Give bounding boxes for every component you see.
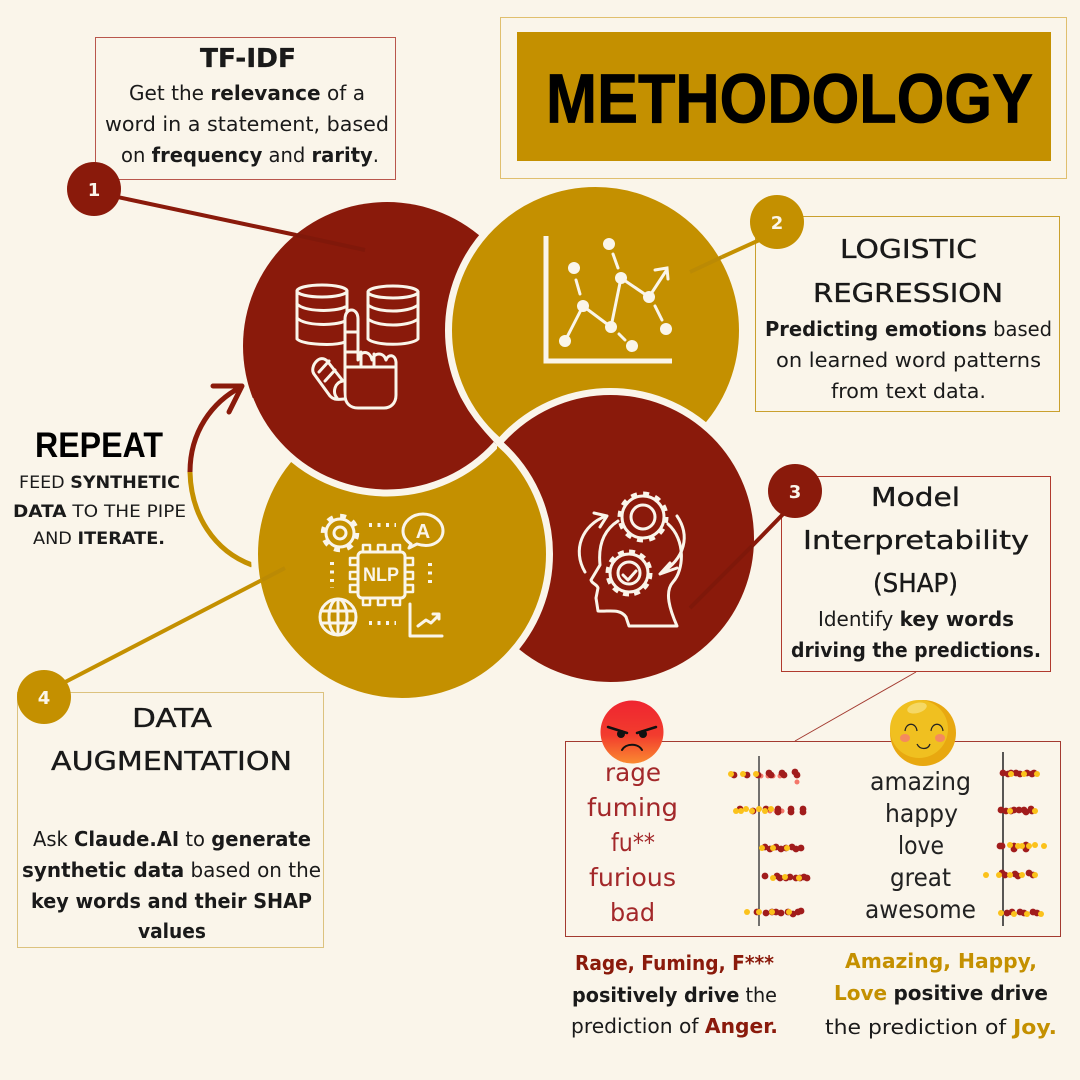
heading: logistic regression: LOGISTIC: [840, 235, 977, 265]
text: logistic description: on learned word patterns: [776, 348, 1041, 372]
list: anger words: fu**: [611, 828, 655, 857]
list: joy words: happy: [885, 799, 958, 828]
text: joy caption: [825, 949, 1057, 1039]
heading: data augmentation: DATA: [132, 704, 212, 734]
text: TF-IDF description: [105, 81, 389, 167]
icon: NLP chip: [320, 514, 443, 636]
circle: interpretability: [464, 392, 758, 686]
icon: angry emoji: [600, 700, 664, 764]
panel: logistic regression: [756, 216, 1060, 412]
line: connector 1: [94, 192, 296, 235]
icon: NLP chip: NLP: [363, 565, 399, 586]
badge: 3: [768, 464, 822, 518]
panel: SHAP beeswarm: [566, 742, 1060, 936]
text: SHAP description: Identify key words: [818, 607, 1014, 631]
text: repeat: [13, 426, 186, 549]
line: connector 4 inner: [262, 568, 285, 580]
text: anger caption: [571, 951, 778, 1038]
text: joy caption: Love positive drive: [834, 981, 1048, 1005]
heading: model interpretability: [803, 483, 1029, 599]
list: anger words: bad: [610, 898, 655, 927]
panel: title: [500, 18, 1066, 178]
list: joy words: amazing: [870, 767, 971, 796]
heading: TF-IDF: TF-IDF: [200, 44, 296, 74]
icon: happy emoji: [890, 700, 956, 766]
line: connector 1 inner: [296, 235, 365, 250]
panel: TF-IDF: [96, 38, 396, 180]
chart: joy SHAP dots: [983, 752, 1047, 926]
text: anger caption: Rage, Fuming, F***: [575, 951, 775, 975]
line: connector 2: [722, 233, 775, 257]
text: SHAP description: driving the predictions.: [791, 638, 1041, 662]
circle: TF-IDF overlap: [252, 398, 497, 496]
heading: model interpretability: Model: [871, 483, 960, 513]
text: anger caption: prediction of Anger.: [571, 1014, 778, 1038]
text: logistic description: Predicting emotions based: [765, 317, 1052, 341]
badge: 1: 1: [88, 180, 100, 201]
icon: databases and hand: [297, 285, 418, 408]
heading: logistic regression: [813, 235, 1003, 309]
text: augmentation description: key words and their SHAP: [31, 889, 312, 913]
heading: model interpretability: (SHAP): [873, 569, 958, 599]
line: connector 3: [752, 507, 790, 546]
text: augmentation description: [22, 827, 321, 943]
list: anger words: furious: [589, 863, 676, 892]
text: SHAP description: [791, 607, 1041, 662]
badge: 4: [17, 670, 71, 724]
heading: data augmentation: AUGMENTATION: [51, 747, 292, 777]
icon: head with gears: [579, 494, 684, 626]
arrow: repeat loop: [190, 386, 252, 565]
heading: logistic regression: REGRESSION: [813, 279, 1003, 309]
text: logistic description: from text data.: [831, 379, 986, 403]
circle: data augmentation: [254, 406, 550, 702]
list: anger words: rage: [605, 758, 661, 787]
badge: 2: 2: [771, 213, 783, 234]
badge: 4: 4: [38, 688, 50, 709]
badge: 1: [67, 162, 121, 216]
text: TF-IDF description: word in a statement, based: [105, 112, 389, 136]
line: connector 3 inner: [690, 546, 752, 608]
text: repeat: AND ITERATE.: [33, 529, 165, 549]
chart: anger SHAP dots: [728, 756, 810, 926]
heading: data augmentation: [51, 704, 292, 777]
text: anger caption: positively drive the: [572, 983, 777, 1007]
badge: 2: [750, 195, 804, 249]
list: joy words: great: [890, 863, 951, 892]
text: repeat: FEED SYNTHETIC: [19, 473, 180, 493]
text: joy caption: the prediction of Joy.: [825, 1015, 1057, 1039]
text: augmentation description: values: [138, 919, 206, 943]
list: anger words: fuming: [587, 793, 678, 822]
badge: 3: 3: [789, 482, 801, 503]
icon: NLP chip: A: [416, 521, 430, 543]
list: joy words: love: [898, 831, 944, 860]
text: repeat: DATA TO THE PIPE: [13, 502, 186, 522]
panel: model interpretability: [782, 476, 1050, 672]
panel: data augmentation: [18, 692, 324, 948]
text: logistic description: [765, 317, 1052, 403]
text: augmentation description: synthetic data based on the: [22, 858, 321, 882]
line: connector 4: [44, 580, 262, 693]
list: joy words: [865, 767, 976, 924]
line: connector 2 inner: [690, 257, 722, 272]
text: TF-IDF description: Get the relevance of a: [129, 81, 365, 105]
text: augmentation description: Ask Claude.AI to generate: [33, 827, 311, 851]
list: joy words: awesome: [865, 895, 976, 924]
list: anger words: [587, 758, 678, 927]
text: repeat: REPEAT: [35, 426, 163, 465]
line: SHAP callout connector: [795, 672, 916, 741]
text: TF-IDF description: on frequency and rarity.: [121, 143, 379, 167]
circle: logistic regression: [448, 184, 742, 478]
icon: line chart: [546, 236, 672, 361]
heading: model interpretability: Interpretability: [803, 526, 1029, 556]
circle: TF-IDF: [243, 202, 531, 490]
text: joy caption: Amazing, Happy,: [845, 949, 1037, 973]
